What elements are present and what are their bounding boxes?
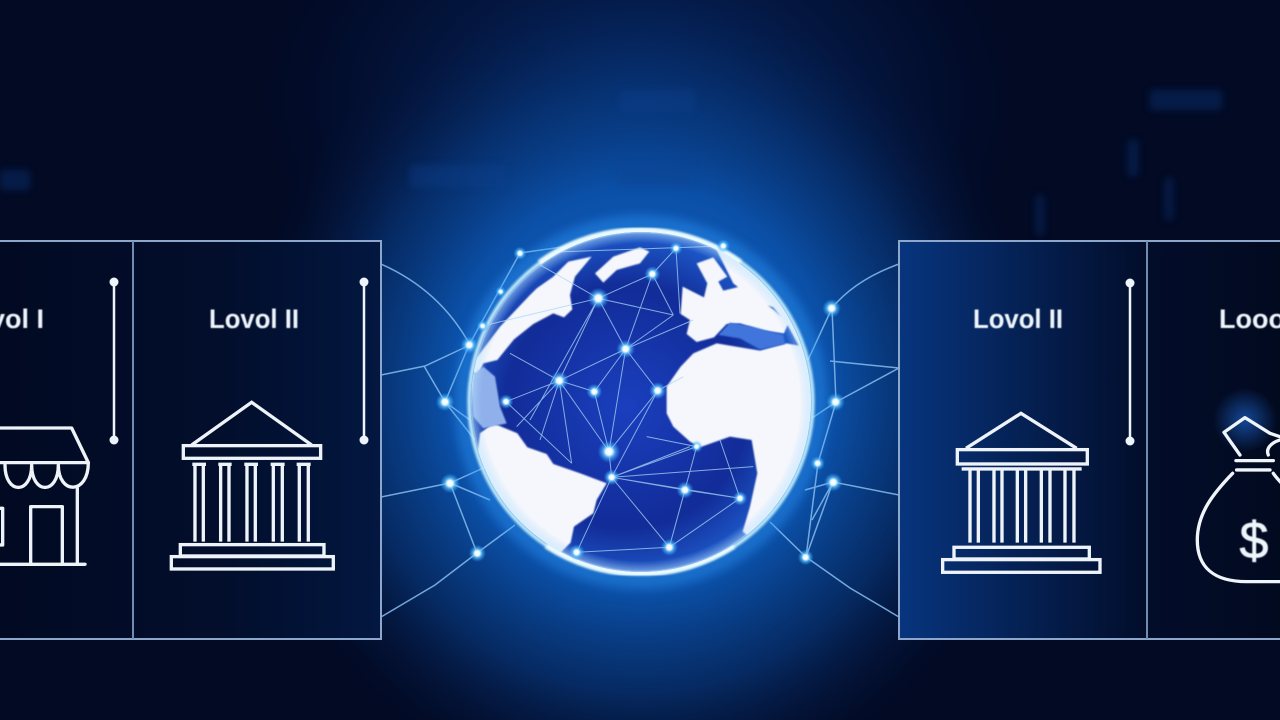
faint background chart marks: [0, 90, 1222, 288]
lower right limb land: [742, 505, 776, 536]
Greenland: [595, 247, 649, 283]
panel: right level boxes: [899, 241, 1280, 639]
globe ocean: [471, 232, 811, 572]
icon: bank building right: [943, 413, 1100, 572]
heading: Lovol II left: Lovol II: [209, 304, 299, 334]
panel: left level boxes: [0, 241, 381, 639]
continents: [472, 246, 811, 552]
scale bar left 2: [360, 278, 368, 444]
globe outer glow: [463, 224, 819, 580]
Mediterranean tint: [718, 323, 785, 349]
scale bar left 1: [110, 278, 118, 444]
Africa: [667, 343, 840, 532]
Europe and Asia: [681, 257, 788, 342]
icon: money bag: [1197, 388, 1280, 582]
icon: storefront: [0, 428, 88, 564]
South America: [473, 423, 607, 557]
network nodes around globe: [436, 247, 845, 565]
left limb mottled land: [471, 367, 507, 428]
connector lines between panels and globe: [381, 243, 899, 617]
network lines on globe: [483, 246, 753, 552]
globe: [436, 224, 845, 580]
North America: [470, 257, 592, 377]
network nodes on globe: [477, 239, 747, 560]
icon: bank building left: [171, 402, 333, 569]
globe limb shading: [471, 232, 811, 572]
heading: Lovol II right: Lovol II: [973, 304, 1063, 334]
dollar sign: $: [1240, 512, 1269, 570]
scale bar right: [1126, 278, 1134, 446]
